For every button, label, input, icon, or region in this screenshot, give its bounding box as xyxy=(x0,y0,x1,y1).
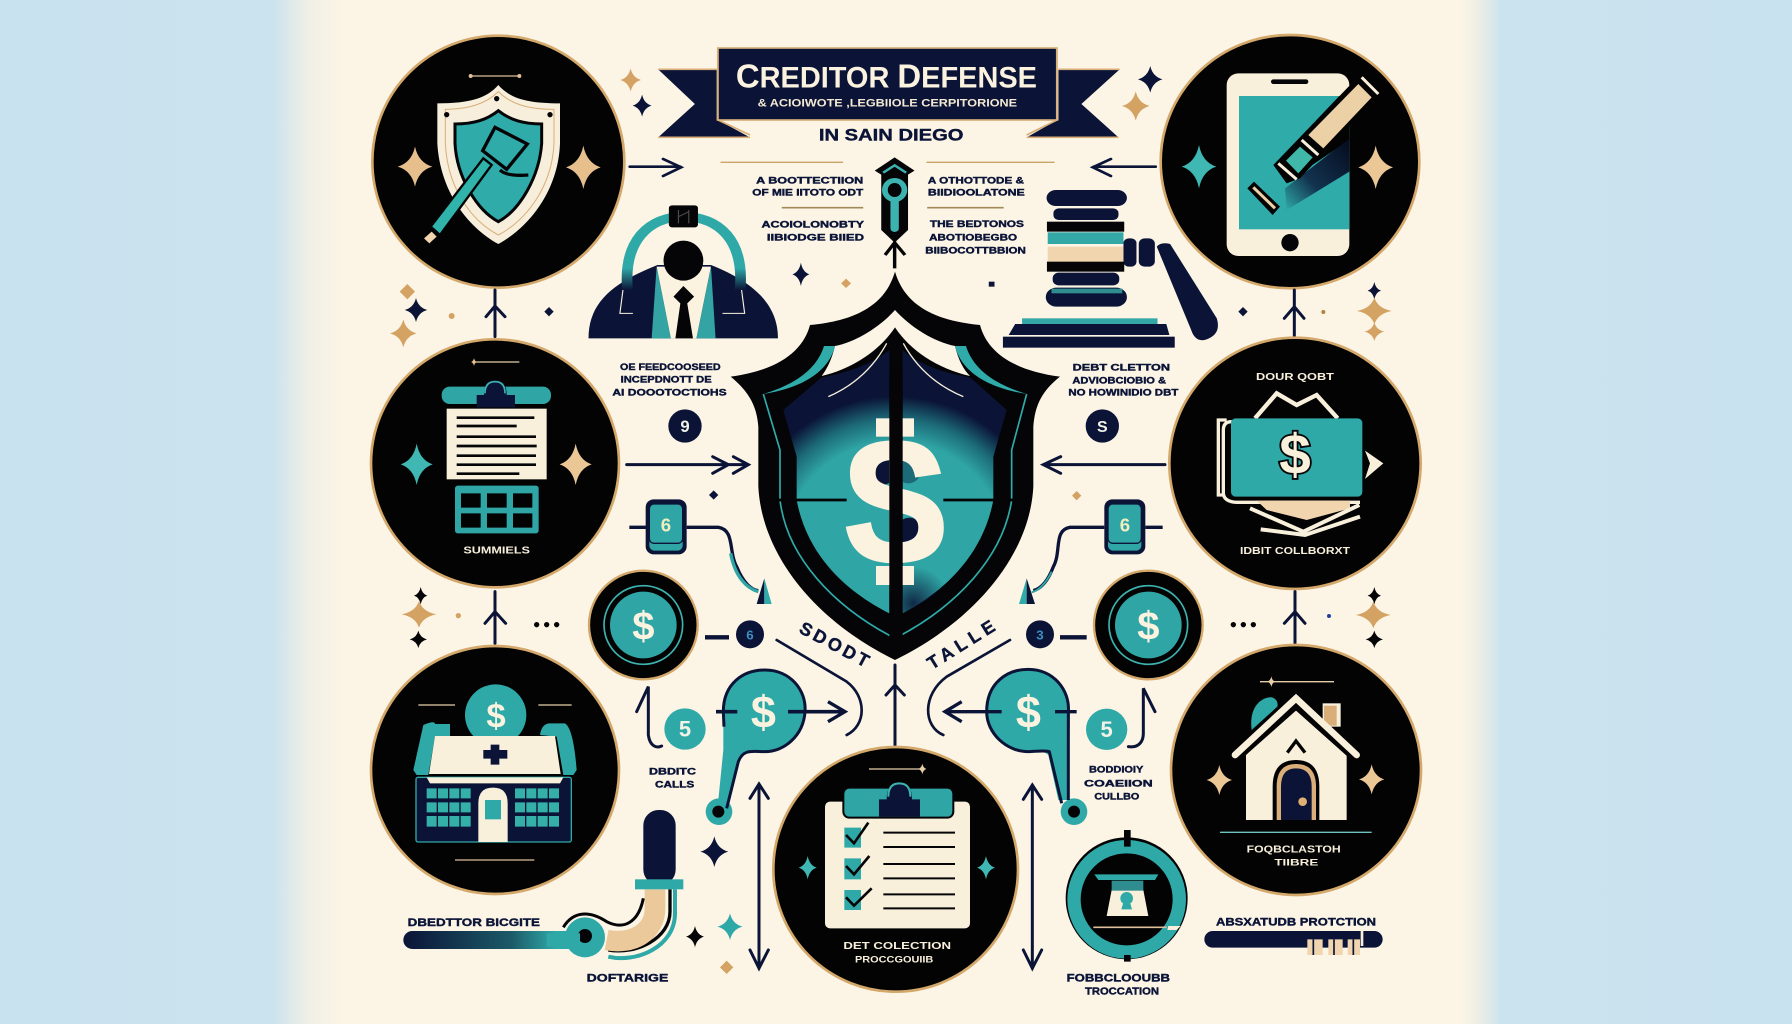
left callout text and number: OE FEEDCOOSEED xyxy=(620,362,721,372)
icon: clipboard xyxy=(442,387,551,404)
icon: teal balloon with dollar right: $ xyxy=(1016,686,1041,737)
panel: summons circle xyxy=(371,339,619,587)
right callout text and number: DEBT CLETTON xyxy=(1073,363,1170,373)
banner subtitle: & ACIOIWOTE ,LEGBIIOLE CERPITORIONE xyxy=(758,96,1017,109)
left callout text and number: AI DOOOTOCTIOHS xyxy=(612,388,727,398)
icon: attorney figure xyxy=(589,205,778,338)
panel: house circle xyxy=(1171,645,1421,895)
center description text blocks: A OTHOTTODE & xyxy=(928,176,1024,186)
number and label debt collection calls right xyxy=(1084,688,1155,801)
arrow: left column lower xyxy=(402,587,559,648)
center description text blocks: ABOTIOBEGBO xyxy=(929,233,1018,243)
right callout text and number xyxy=(1068,363,1179,443)
small node left xyxy=(705,620,764,648)
small node right xyxy=(1026,620,1087,648)
decorative sparkles around banner xyxy=(620,66,1162,288)
ribbon right tail xyxy=(1027,69,1120,137)
number and label debt collection calls right: COAEIION xyxy=(1084,779,1153,789)
label: foreclosure protection: FOBBCLOOUBB xyxy=(1067,973,1170,985)
panel: small dollar coin right xyxy=(1094,571,1203,679)
number and label debt calls left xyxy=(637,687,706,789)
curved label left: SDODT xyxy=(796,618,873,671)
small node right: 3 xyxy=(1036,627,1044,642)
title banner xyxy=(658,48,1120,144)
defense label: DOFTARIGE xyxy=(587,973,668,985)
circle label: SUMMIELS xyxy=(463,545,530,556)
right callout text and number: S xyxy=(1097,419,1108,436)
number and label debt collection calls right: 5 xyxy=(1101,717,1113,742)
arrow: right column upper xyxy=(1238,282,1392,341)
left callout text and number: INCEPDNOTT DE xyxy=(621,375,712,385)
center description text blocks: A BOOTTECTIION xyxy=(756,176,863,186)
center description text blocks: BIIBOCOTTBBION xyxy=(925,246,1026,256)
sparkles xyxy=(700,836,728,867)
gavel base xyxy=(1022,318,1158,324)
center description text blocks xyxy=(721,162,1055,256)
central shield xyxy=(731,272,1060,660)
right device connector xyxy=(1019,491,1163,604)
icon: gavel xyxy=(431,158,492,235)
right callout text and number: ADVIOBCIOBIO & xyxy=(1072,375,1167,385)
icon: cash stack xyxy=(1255,393,1338,418)
arrow: top left to center xyxy=(630,159,681,176)
panel: debt collection procedure circle xyxy=(773,747,1018,992)
label: foreclosure protection: TROCCATION xyxy=(1085,986,1159,997)
debtor rights label: DBEDTTOR BICGITE xyxy=(408,917,540,929)
panel: small dollar coin right: $ xyxy=(1137,604,1159,648)
icon: building xyxy=(416,777,571,842)
arrow: top right to center xyxy=(1093,159,1156,176)
center description text blocks: ACOIOLONOBTY xyxy=(761,220,865,230)
number and label debt collection calls right: BODDIOIY xyxy=(1089,765,1143,775)
number and label debt calls left: CALLS xyxy=(655,779,694,789)
arrow: summons to shield xyxy=(627,457,748,473)
gavel head stack xyxy=(1047,190,1127,206)
absolute protection label and bar: ABSXATUDB PROTCTION xyxy=(1216,917,1376,929)
heading: CREDITOR DEFENSE xyxy=(736,58,1037,95)
panel: hospital building circle: $ xyxy=(486,697,506,735)
icon: coin xyxy=(465,684,526,746)
panel: debt collector circle xyxy=(1169,338,1421,589)
gavel handle xyxy=(1157,243,1218,340)
icon: house xyxy=(1251,697,1278,730)
panel: small dollar coin left: $ xyxy=(632,604,654,648)
double arrow left of center xyxy=(750,784,768,968)
arrow: left column upper xyxy=(390,284,554,347)
icon: diagonal gavel xyxy=(1273,83,1375,183)
right device connector: 6 xyxy=(1120,515,1130,536)
left device connector: 6 xyxy=(661,515,671,536)
center description text blocks: THE BEDTONOS xyxy=(930,220,1025,230)
left callout text and number: 9 xyxy=(680,417,690,436)
circle label: DET COLECTION xyxy=(843,941,951,952)
icon: shield xyxy=(437,85,560,244)
arrow: debt collector to shield xyxy=(1043,457,1165,473)
icon: teal balloon with dollar left xyxy=(706,670,845,825)
number and label debt calls left: 5 xyxy=(679,717,691,742)
panel: lock circle xyxy=(1066,830,1188,962)
panel: shield and gavel circle xyxy=(372,36,624,288)
icon: phone xyxy=(1227,73,1349,256)
number and label debt collection calls right: CULLBO xyxy=(1094,791,1139,801)
double arrow right of center xyxy=(1023,785,1042,968)
shield cream highlight xyxy=(822,310,970,376)
panel: small dollar coin left xyxy=(589,571,698,679)
small node left: 6 xyxy=(746,627,754,642)
icon: teal balloon with dollar right xyxy=(945,669,1087,825)
absolute protection label and bar xyxy=(1204,917,1383,955)
panel: hospital building circle xyxy=(371,646,619,894)
icon: keyhole tower xyxy=(875,157,915,268)
icon: table xyxy=(455,486,539,533)
center description text blocks: OF MIE IITOTO ODT xyxy=(752,188,863,198)
right callout text and number: NO HOWINIDIO DBT xyxy=(1068,388,1179,398)
icon: checklist xyxy=(825,802,970,928)
circle label bottom: IDBIT COLLBORXT xyxy=(1240,546,1350,557)
label: foreclosure protection xyxy=(1067,973,1170,997)
center description text blocks: BIIDIOOLATONE xyxy=(928,188,1025,198)
panel: phone and gavel circle xyxy=(1161,35,1419,288)
center description text blocks: IIBIODGE BIIED xyxy=(767,233,864,243)
panel: debt collector circle: $ xyxy=(1279,424,1311,487)
banner plate xyxy=(718,48,1057,120)
ribbon left tail xyxy=(658,69,750,137)
curved connectors and center arrow xyxy=(777,640,1010,745)
curved label right: TALLE xyxy=(924,616,999,673)
panel: debt collection procedure circle: PROCCGOUIIB xyxy=(855,954,934,964)
icon: judge gavel and stack xyxy=(1003,190,1218,348)
left callout text and number xyxy=(612,362,727,443)
arrow: right column lower xyxy=(1231,587,1391,648)
location line: IN SAIN DIEGO xyxy=(819,125,964,144)
panel: house circle: TIIBRE xyxy=(1274,858,1318,868)
number and label debt calls left: DBDITC xyxy=(649,766,697,776)
left device connector xyxy=(629,490,772,604)
shield teal field xyxy=(783,350,1007,613)
circle label: FOQBCLASTOH xyxy=(1247,844,1341,855)
icon: teal balloon with dollar left: $ xyxy=(751,686,776,737)
icon: teal wrench pipe xyxy=(403,810,743,985)
circle label top: DOUR QOBT xyxy=(1256,372,1334,383)
dollar sign: $ xyxy=(845,402,945,603)
